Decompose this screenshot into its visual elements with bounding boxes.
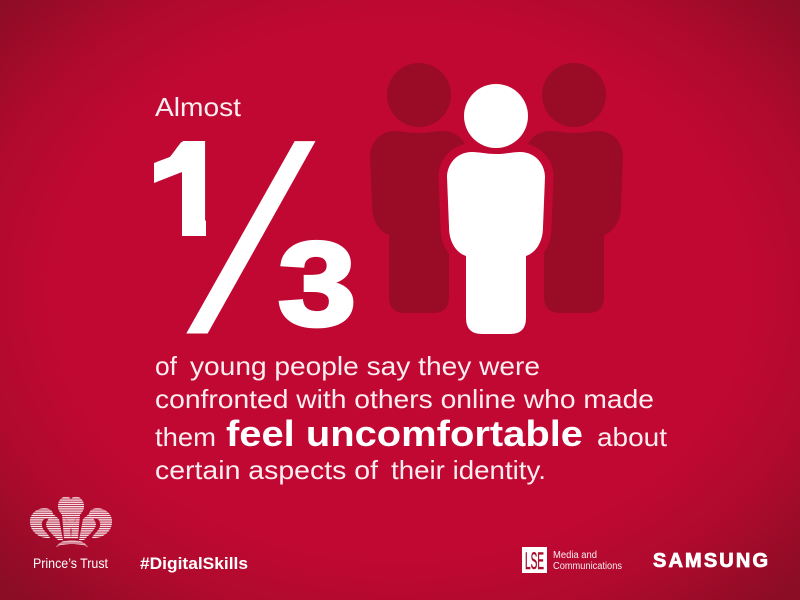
icon: right background person <box>525 63 623 313</box>
icon: highlighted centre person <box>447 84 545 334</box>
LSE badge <box>522 547 547 573</box>
statement text: confronted with others online who made <box>155 384 654 414</box>
statement text: about <box>597 422 668 452</box>
statement text: their identity. <box>391 455 546 485</box>
statement text: feel uncomfortable <box>226 413 583 454</box>
statement text: young people say they were <box>190 351 540 381</box>
statement text: them <box>155 422 216 452</box>
fraction slash: / <box>171 95 329 387</box>
numeral one <box>154 141 206 236</box>
icon: left background person <box>370 63 468 313</box>
logo: LSE Media and Communications <box>522 547 622 575</box>
numeral three: 3 <box>278 217 356 351</box>
organisation name: Prince’s Trust <box>33 555 108 571</box>
logo: LSE Media and Communications: LSE <box>525 548 544 575</box>
logo: Prince's Trust <box>30 497 112 571</box>
department name: Media and <box>553 550 597 561</box>
statement text: certain aspects of <box>155 455 379 485</box>
icon: three feathers <box>30 497 112 547</box>
numeral one: 1 <box>148 114 231 265</box>
icon: group of three people <box>370 63 623 334</box>
logo: LSE Media and Communications: Communications <box>553 561 622 572</box>
logo: Samsung: SAMSUNG <box>653 550 768 572</box>
statement text <box>155 351 668 485</box>
statement text: of <box>155 351 178 381</box>
hashtag: #DigitalSkills <box>140 554 248 573</box>
intro word: Almost: Almost <box>155 92 242 122</box>
fraction: one third <box>154 141 354 334</box>
